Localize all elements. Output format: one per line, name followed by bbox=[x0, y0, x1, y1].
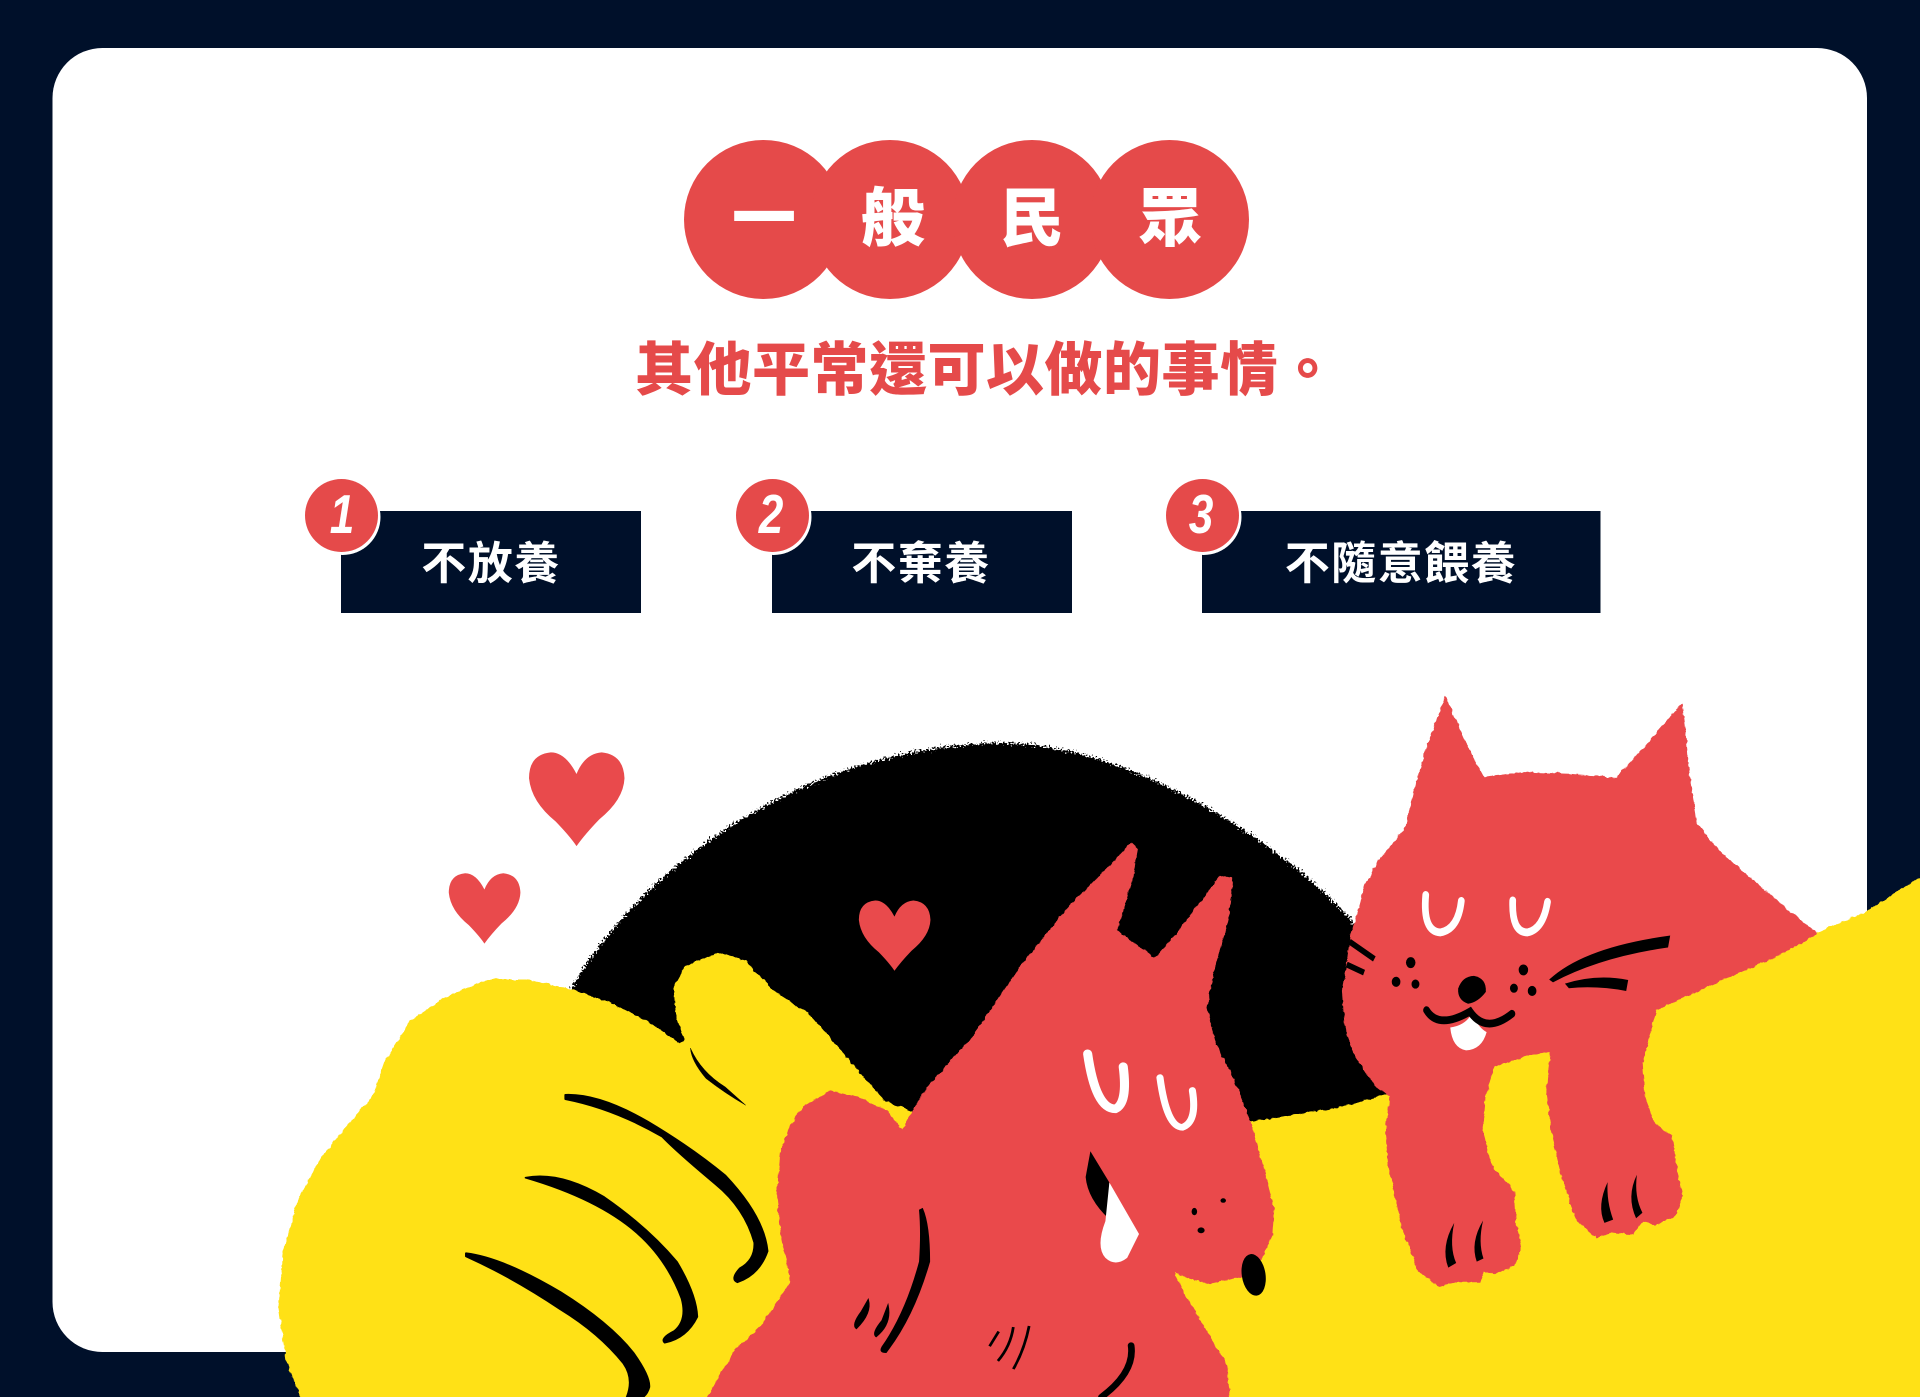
item 1: 不放養: 1 bbox=[330, 483, 354, 545]
heart on black bbox=[859, 900, 930, 971]
hand finger lines bbox=[466, 1048, 767, 1397]
item 2: 不棄養 bbox=[736, 479, 1072, 613]
item 3: 不隨意餵養: 3 bbox=[1189, 483, 1213, 545]
item 2: 不棄養: 2 bbox=[758, 483, 783, 545]
heart large bbox=[529, 752, 624, 846]
item 1: 不放養: 不放養 bbox=[421, 538, 561, 589]
heading badge: 一般民眾 bbox=[684, 140, 1249, 299]
heading badge: 一般民眾: 般 bbox=[861, 183, 925, 255]
hand shape bbox=[279, 953, 914, 1397]
heading badge: 一般民眾: 民 bbox=[1000, 183, 1064, 255]
item 3: 不隨意餵養 bbox=[1166, 479, 1600, 613]
heading badge: 一般民眾: 眾 bbox=[1138, 183, 1202, 255]
black furry dome bbox=[570, 743, 1420, 1130]
yellow hand bbox=[279, 953, 914, 1397]
cat body bbox=[1343, 697, 1816, 1286]
heart small left bbox=[449, 873, 520, 944]
yellow body on right bbox=[1100, 840, 1920, 1397]
cat face details bbox=[1347, 895, 1670, 1268]
item 3: 不隨意餵養: 不隨意餵養 bbox=[1285, 538, 1517, 589]
item 2: 不棄養: 不棄養 bbox=[851, 538, 991, 589]
cat bbox=[1343, 697, 1816, 1286]
crying dog bbox=[692, 844, 1273, 1397]
hearts bbox=[449, 752, 930, 971]
item 1: 不放養 bbox=[304, 479, 641, 613]
dog body bbox=[692, 844, 1273, 1397]
dog face and body details bbox=[855, 1054, 1269, 1397]
heading badge: 一般民眾: 一 bbox=[732, 183, 796, 255]
subtitle: 其他平常還可以做的事情。 bbox=[635, 338, 1337, 403]
